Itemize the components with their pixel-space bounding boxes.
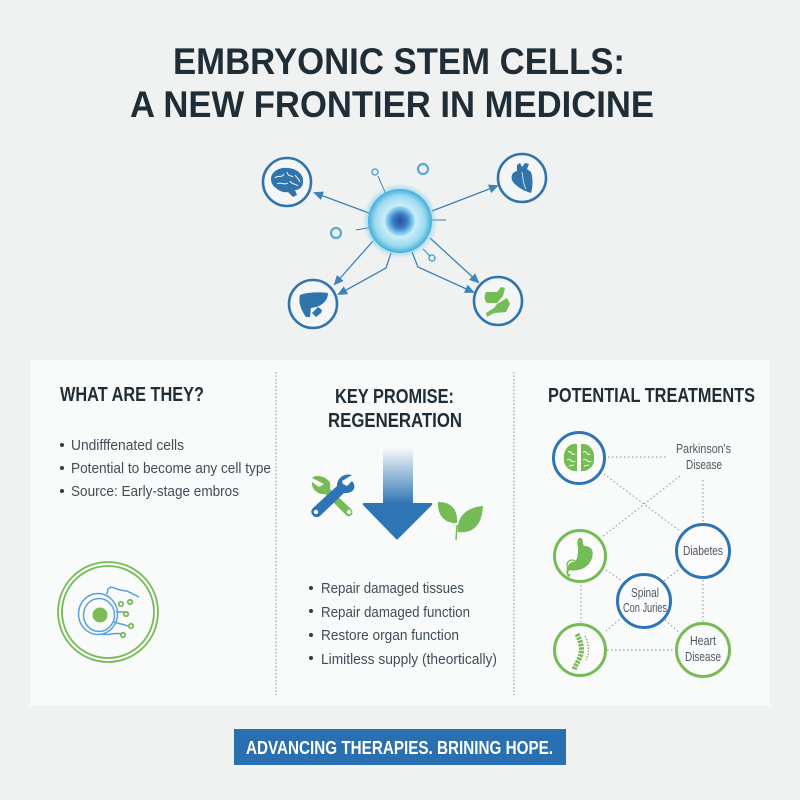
heading: potential treatments: POTENTIAL TREATMENTS [548, 385, 755, 407]
node: spinal cord injuries: Con Juries [623, 601, 667, 615]
node: spinal cord injuries: Spinal [631, 586, 659, 600]
label: parkinson's disease [676, 442, 731, 472]
icon: heart [498, 154, 546, 202]
arrow: regeneration [363, 448, 432, 540]
panel: content card [30, 360, 770, 706]
icon: pancreas [474, 277, 522, 325]
label: parkinson's disease: Disease [686, 458, 722, 472]
icon: liver [289, 280, 337, 328]
node: heart disease: Disease [685, 650, 721, 664]
label: parkinson's disease: Parkinson's [676, 442, 731, 456]
title: A NEW FRONTIER IN MEDICINE [130, 84, 654, 125]
dotted connection network [581, 457, 703, 650]
panel: key promise [309, 386, 497, 668]
heading: key promise [328, 386, 462, 432]
bullet list: definition [60, 437, 271, 500]
title [130, 41, 654, 125]
node: diabetes [676, 524, 730, 578]
bullet list: benefits: Restore organ function [321, 627, 459, 644]
node: heart disease [676, 624, 730, 676]
node: brain [554, 432, 604, 484]
small satellite rings [331, 164, 446, 261]
heading: key promise: KEY PROMISE: [335, 386, 454, 408]
bullet list: benefits: Repair damaged function [321, 604, 470, 621]
node: spine [554, 624, 606, 676]
connector arrows [315, 186, 497, 294]
bullet list: definition: Potential to become any cell type [71, 460, 271, 477]
central stem cell [362, 183, 438, 259]
panel: what are they [58, 384, 271, 662]
bullet list: benefits: Repair damaged tissues [321, 580, 464, 597]
node: heart disease: Heart [690, 634, 716, 648]
icon: tools [311, 475, 354, 517]
bullet list: benefits [309, 580, 497, 668]
heading: what are they: WHAT ARE THEY? [60, 384, 204, 406]
panel: potential treatments [548, 385, 755, 676]
title: EMBRYONIC STEM CELLS: [173, 41, 625, 82]
node: spinal cord injuries [618, 574, 670, 628]
bullet list: benefits: Limitless supply (theortically) [321, 651, 497, 668]
icon: leaf [438, 502, 483, 540]
icon: brain [263, 158, 311, 206]
bullet list: definition: Source: Early-stage embros [71, 483, 239, 500]
icon: stem cell [58, 562, 158, 662]
footer banner [234, 729, 566, 765]
heading: key promise: REGENERATION [328, 410, 462, 432]
footer banner: ADVANCING THERAPIES. BRINING HOPE. [246, 738, 553, 758]
node: stomach [554, 530, 606, 582]
node: diabetes: Diabetes [683, 544, 723, 558]
stem cell diagram [263, 154, 546, 328]
bullet list: definition: Undifffenated cells [71, 437, 184, 454]
